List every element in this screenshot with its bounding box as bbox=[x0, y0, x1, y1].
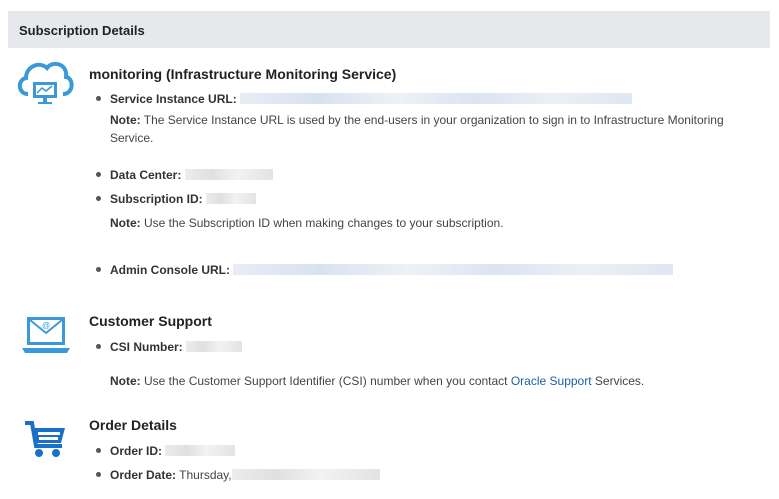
section: order details bbox=[89, 417, 380, 482]
section: order details: Order Date: Thursday, bbox=[110, 468, 232, 482]
section: customer support bbox=[89, 313, 644, 388]
icon: laptop mail: @ bbox=[42, 321, 50, 330]
section: monitoring: monitoring (Infrastructure Monitoring Service) bbox=[89, 66, 396, 82]
section: order details: Order ID: bbox=[110, 444, 162, 458]
section: monitoring: Data Center: bbox=[110, 168, 181, 182]
section: monitoring: Admin Console URL: bbox=[110, 263, 230, 277]
section: customer support: CSI Number: bbox=[110, 340, 183, 354]
section: monitoring: Subscription ID: bbox=[110, 192, 203, 206]
section: customer support: Customer Support bbox=[89, 313, 212, 329]
icon: cloud monitor bbox=[18, 62, 74, 104]
header bar: Subscription Details bbox=[19, 23, 145, 38]
section: monitoring: Service. bbox=[110, 131, 153, 145]
icon: cart bbox=[25, 421, 65, 457]
section: order details: Order Details bbox=[89, 417, 177, 433]
icon: laptop mail bbox=[22, 317, 70, 353]
section: monitoring: Note: Use the Subscription ID when making changes to your subscription. bbox=[110, 216, 504, 230]
section: monitoring bbox=[89, 66, 724, 277]
header bar bbox=[8, 11, 770, 48]
section: monitoring: Service Instance URL: bbox=[110, 92, 237, 106]
section: customer support: Note: Use the Customer Support Identifier (CSI) number when you contact Oracle Support Services. bbox=[110, 374, 644, 388]
section: monitoring: Note: The Service Instance URL is used by the end-users in your organization to sign in to Infrastructure Monitoring bbox=[110, 113, 724, 127]
